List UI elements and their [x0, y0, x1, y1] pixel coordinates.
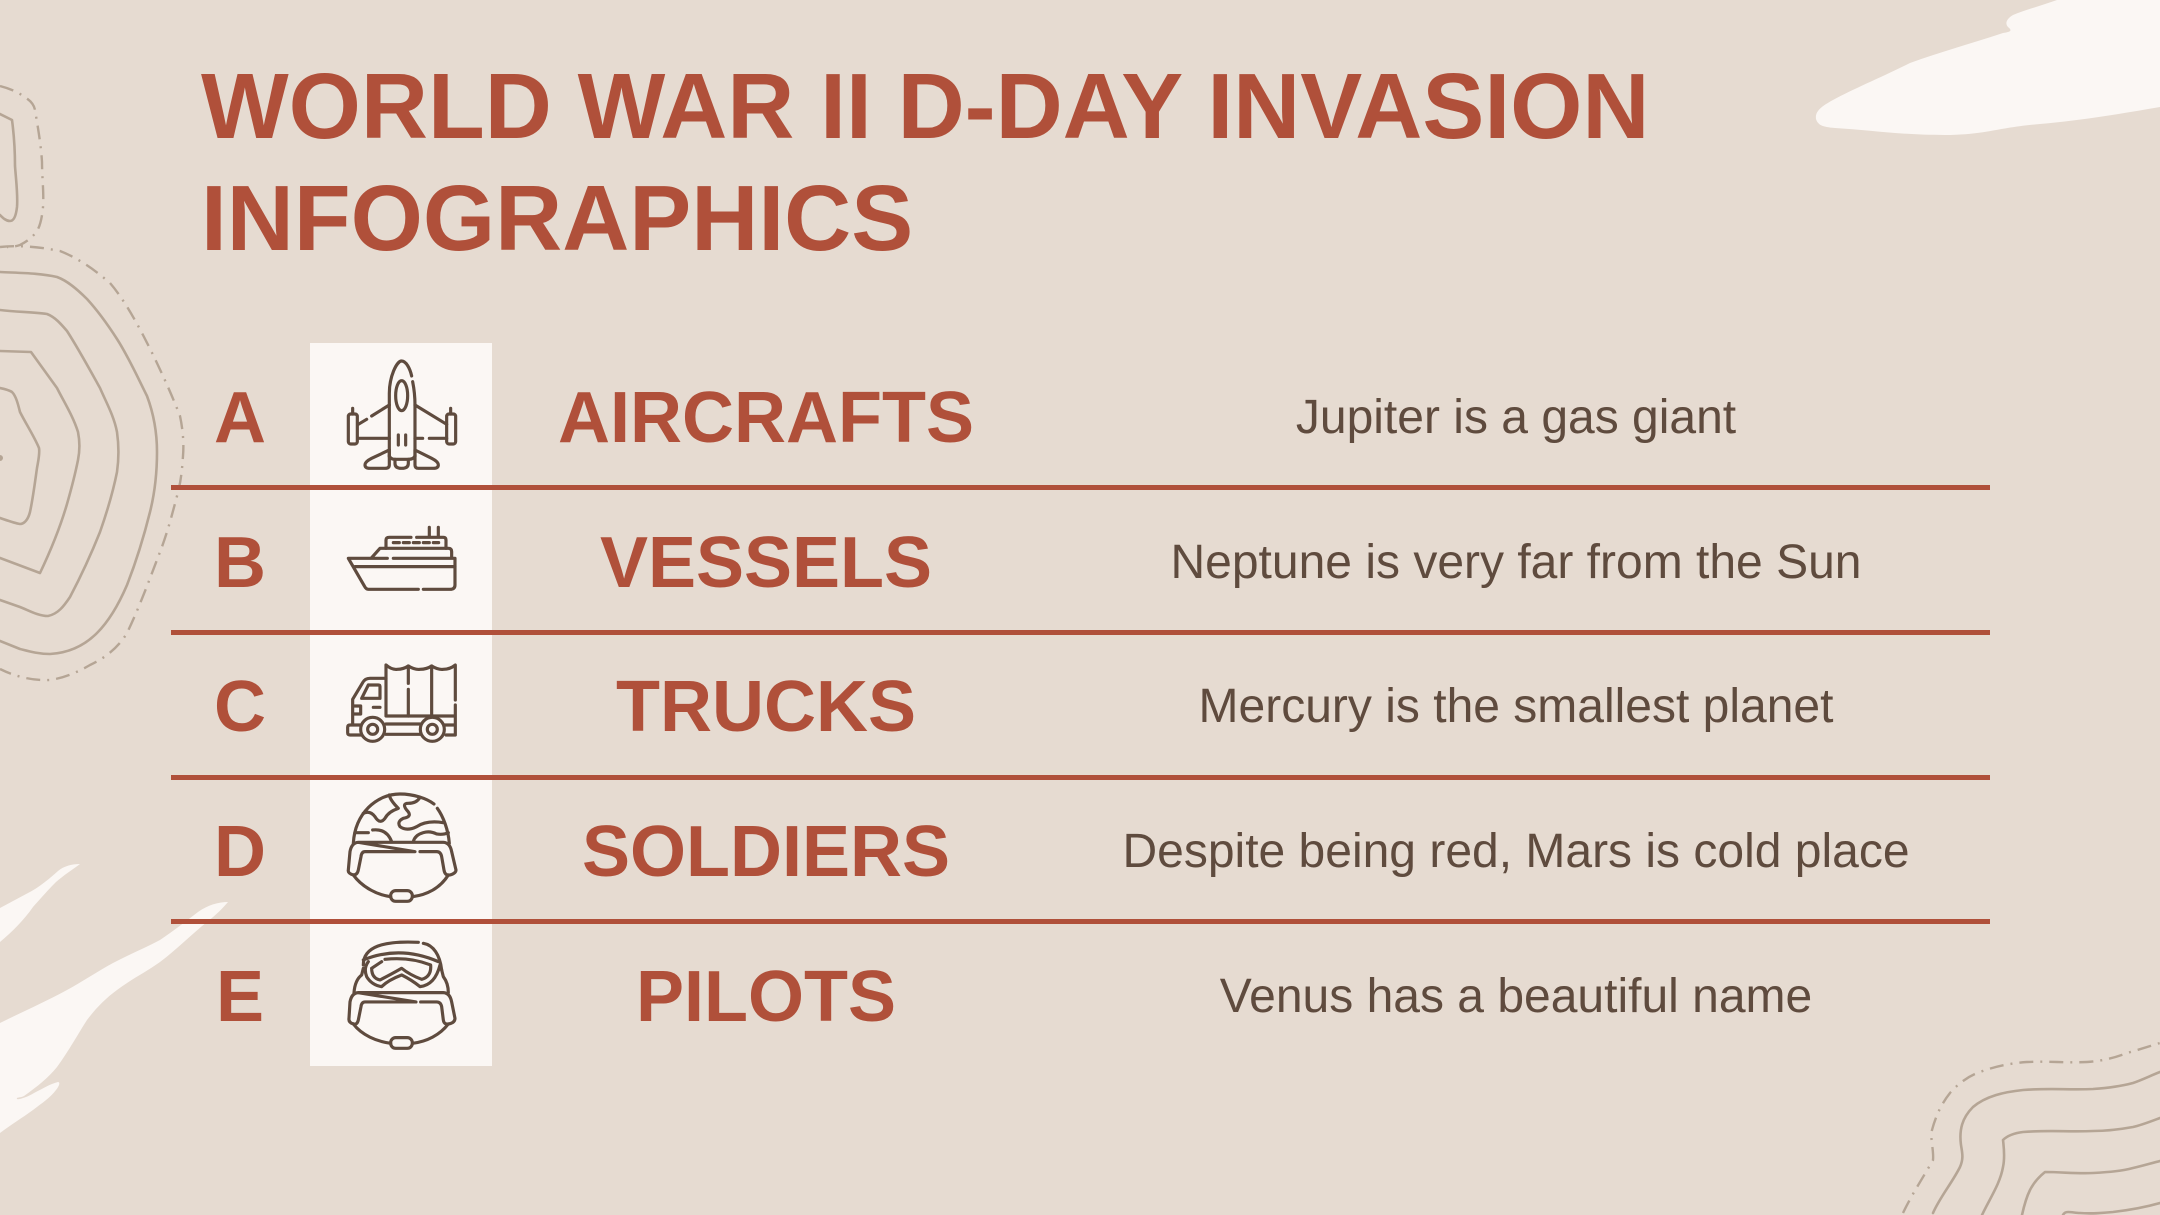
- row B description: Neptune is very far from the Sun: [1170, 536, 1861, 589]
- divider: row B: [171, 630, 1990, 634]
- row E letter: E: [216, 957, 264, 1037]
- row E description: Venus has a beautiful name: [1220, 970, 1812, 1023]
- row E heading: PILOTS: [636, 957, 896, 1037]
- divider: row C: [171, 775, 1990, 780]
- row C description: Mercury is the smallest planet: [1199, 680, 1833, 733]
- brush stroke: top right: [1816, 0, 2160, 135]
- panel: icon column: [310, 343, 492, 1066]
- row D heading: SOLDIERS: [582, 812, 950, 892]
- title: WORLD WAR II D-DAY INVASION: [201, 54, 1649, 158]
- row B heading: VESSELS: [600, 523, 932, 603]
- divider: row A: [171, 485, 1990, 490]
- row C letter: C: [214, 667, 266, 747]
- brush stroke: bottom left small: [0, 864, 80, 942]
- contour lines: bottom right: [1903, 1043, 2160, 1215]
- row D letter: D: [214, 812, 266, 892]
- brush stroke: bottom left large: [0, 902, 228, 1133]
- row C heading: TRUCKS: [616, 667, 916, 747]
- divider: row D: [171, 919, 1990, 924]
- row A letter: A: [214, 378, 266, 458]
- row A description: Jupiter is a gas giant: [1296, 391, 1736, 444]
- title: [201, 54, 1649, 270]
- title: INFOGRAPHICS: [201, 166, 913, 270]
- row A heading: AIRCRAFTS: [558, 378, 974, 458]
- row B letter: B: [214, 523, 266, 603]
- row D description: Despite being red, Mars is cold place: [1122, 825, 1910, 878]
- contour lines: left: [0, 86, 183, 680]
